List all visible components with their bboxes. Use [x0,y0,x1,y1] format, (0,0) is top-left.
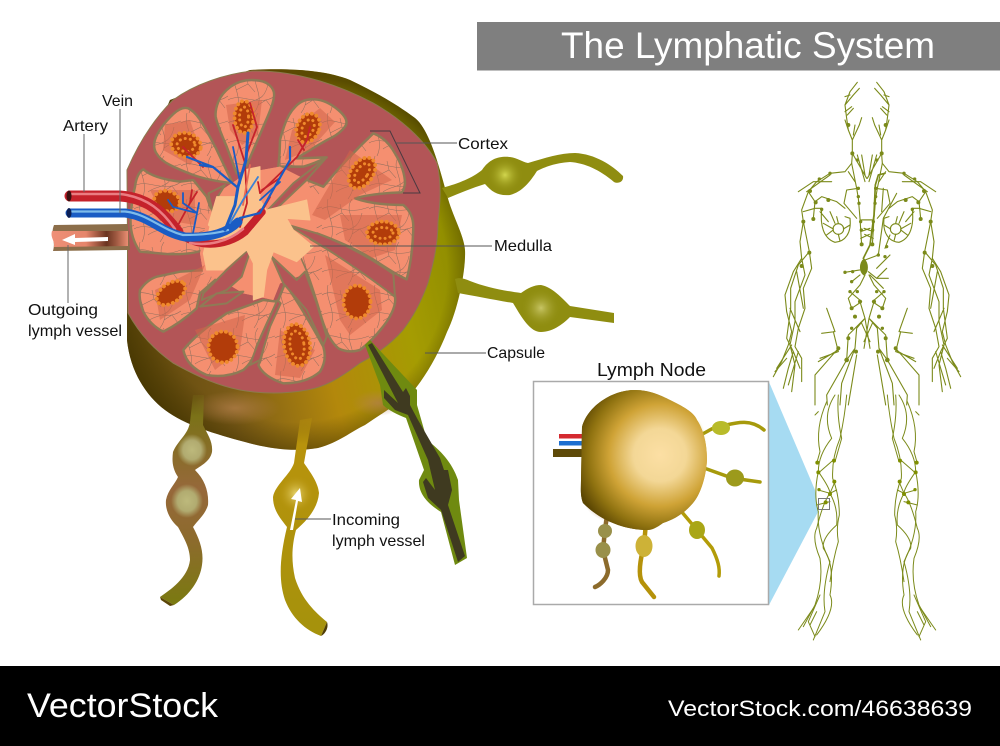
artery branches [177,103,310,227]
label: Vein [102,93,133,213]
trabecular wedges [200,157,395,365]
zoom wedge [769,382,818,605]
germinal centers [152,101,399,368]
title banner [477,22,1000,70]
shaded follicle patches [150,100,402,378]
upper body left half [773,82,872,405]
vessel: bottom left incoming [160,395,212,606]
artery [66,103,310,244]
medulla [203,167,313,300]
label: Outgoing lymph vessel: Outgoing [28,302,98,319]
arrow: outgoing flow [62,234,108,245]
legs right half [887,395,936,640]
cut face [127,71,440,393]
lobule shapes [131,80,413,383]
vein branches [168,133,290,233]
germinal center inner dots [177,107,393,360]
cortex lobules and medulla [131,80,413,383]
label: Capsule: Capsule [487,345,545,362]
outgoing lymph vessel [52,224,130,251]
label: Medulla: Medulla [494,238,552,255]
label: Incoming lymph vessel [295,512,425,550]
label: Artery: Artery [63,118,108,135]
capsule [127,69,465,450]
label: Outgoing lymph vessel: lymph vessel [28,323,122,340]
inset node body [581,390,707,530]
central pink tissue [200,167,317,300]
lymphatic system figure [773,82,961,640]
reticular web [131,80,413,383]
vein [66,133,290,237]
vessel: bottom middle incoming [273,418,328,636]
lymph node cross-section [52,69,623,636]
title banner: The Lymphatic System [561,25,935,66]
label: Cortex with bracket: Cortex [458,136,508,153]
inset artery and vein stubs [553,434,583,457]
dark incoming vessel [365,340,467,565]
label: Artery [63,118,108,192]
inset heading: Lymph Node [597,360,706,380]
upper body right half [862,82,961,405]
label: Outgoing lymph vessel [28,245,122,340]
arrow: incoming flow [290,488,302,530]
label: Cortex with bracket [370,131,508,193]
legs left half [798,395,847,640]
vessel: upper right incoming [442,153,623,198]
label: Incoming lymph vessel: lymph vessel [332,533,425,550]
thoracic duct and cisterna [843,173,897,288]
vessel: mid right incoming [455,278,614,332]
magnifier square on knee [818,498,830,510]
label: Vein: Vein [102,93,133,110]
inset vessels [595,421,764,597]
footer bar: VectorStock [27,687,219,725]
footer bar: VectorStock.com/46638639 [668,696,972,721]
label: Incoming lymph vessel: Incoming [332,512,400,529]
footer bar [0,666,1000,746]
inset: lymph node exterior [534,382,768,604]
label: Capsule [425,345,545,362]
